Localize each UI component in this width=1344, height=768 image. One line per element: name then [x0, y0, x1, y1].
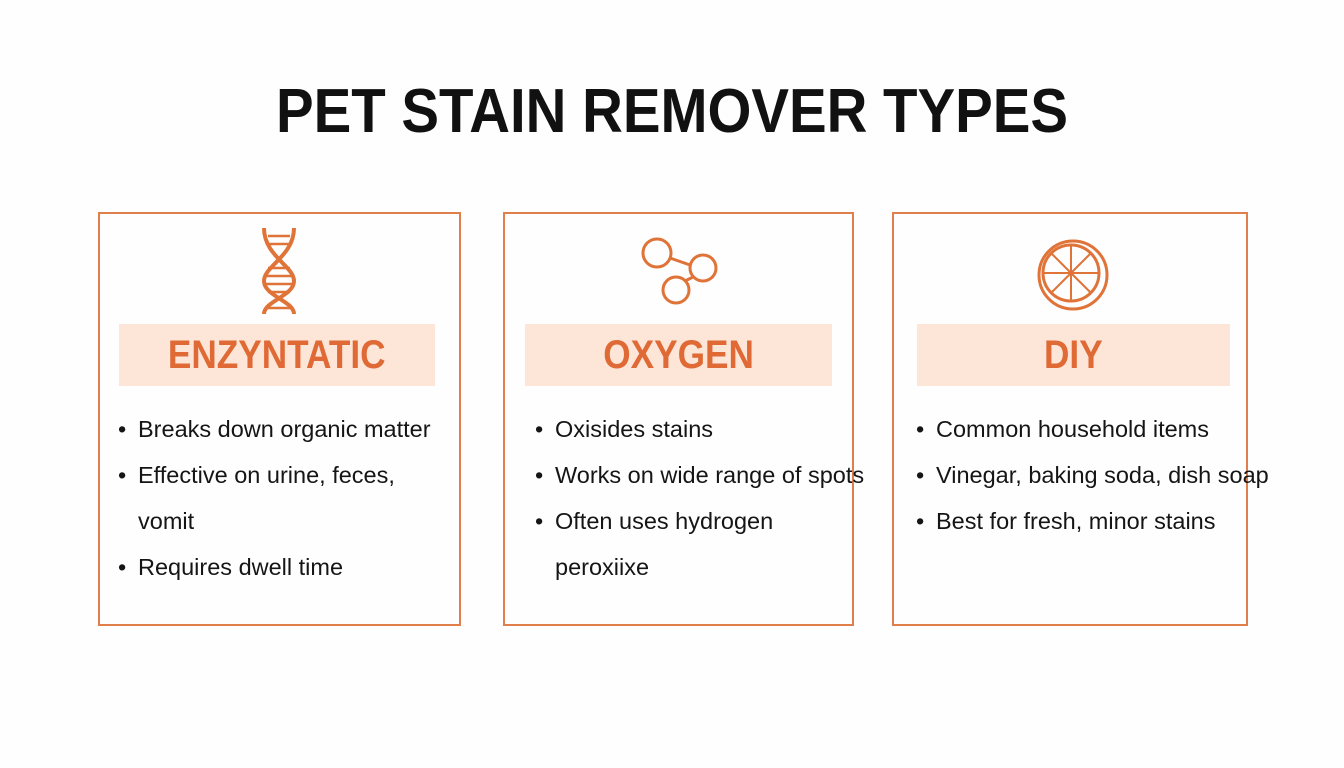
- icon: citrus slice: [1038, 240, 1108, 310]
- title: PET STAIN REMOVER TYPES: [276, 77, 1068, 146]
- bullet list: Common household items: [936, 416, 1209, 442]
- bullet list: Often uses hydrogen: [555, 508, 773, 534]
- label band: [119, 324, 435, 386]
- label band: [917, 324, 1230, 386]
- bullet list: [916, 416, 1269, 534]
- bullet list: vomit: [138, 508, 194, 534]
- bullet list: Requires dwell time: [138, 554, 343, 580]
- bullet list: Vinegar, baking soda, dish soap: [936, 462, 1269, 488]
- label band: ENZYNTATIC: [168, 332, 386, 376]
- bullet list: Best for fresh, minor stains: [936, 508, 1216, 534]
- bullet list: Breaks down organic matter: [138, 416, 431, 442]
- bullet list: Works on wide range of spots: [555, 462, 864, 488]
- panel: diy: [892, 212, 1248, 626]
- bullet list: Oxisides stains: [555, 416, 713, 442]
- bullet list: [536, 416, 864, 580]
- bullet list: [118, 416, 431, 580]
- icon: molecule: [642, 238, 718, 304]
- bullet list: Effective on urine, feces,: [138, 462, 395, 488]
- panel: enzymatic: [98, 212, 461, 626]
- label band: [525, 324, 832, 386]
- panel: oxygen: [503, 212, 854, 626]
- label band: OXYGEN: [603, 332, 754, 376]
- icon: dna: [262, 228, 296, 314]
- label band: DIY: [1044, 332, 1103, 376]
- bullet list: peroxiixe: [555, 554, 649, 580]
